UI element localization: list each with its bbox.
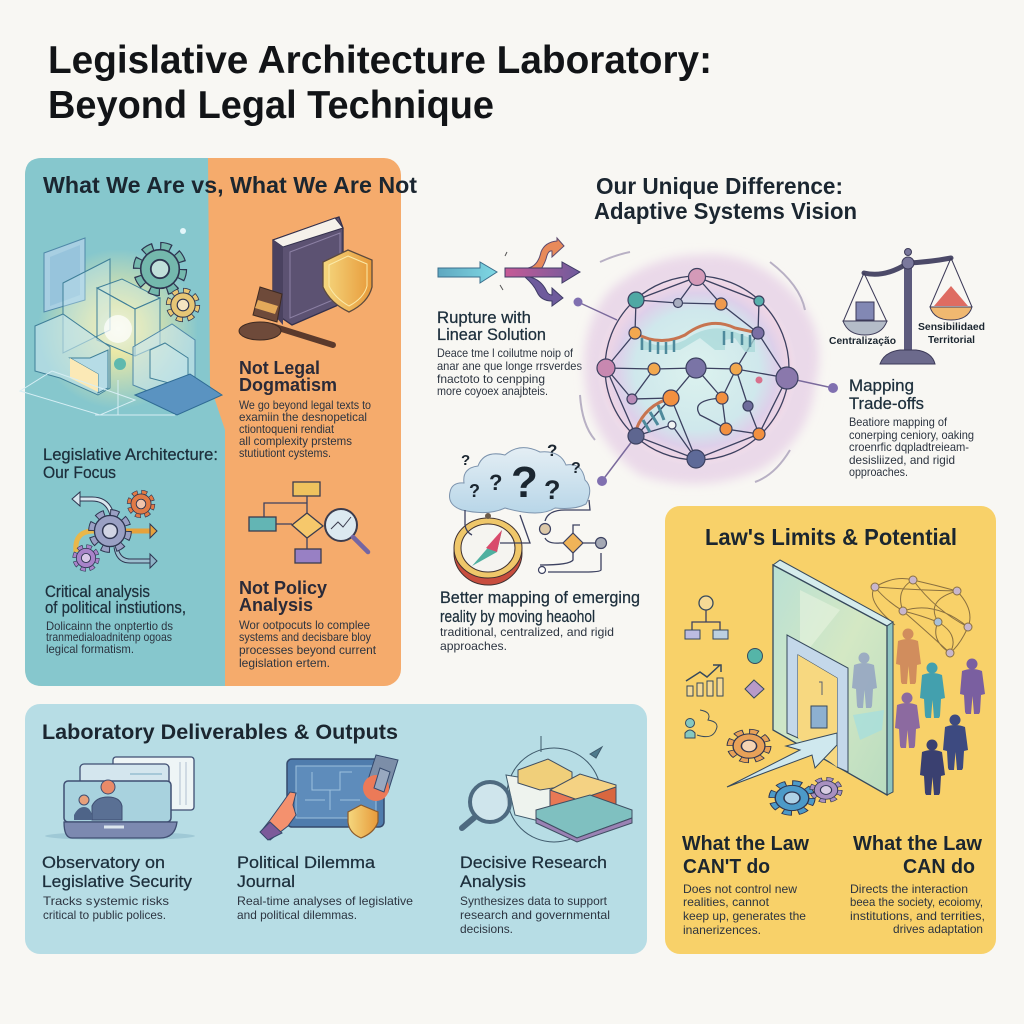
text: political dilemma journal: Journal	[237, 873, 295, 891]
text: critical analysis: Dolicainn the onptertio ds	[46, 619, 173, 633]
text: what the law cant do: CAN'T do	[683, 856, 770, 878]
text: what the law can do: Directs the interaction	[850, 882, 968, 896]
icon: compass	[454, 513, 522, 585]
panel: what we are vs what we are not	[20, 158, 417, 686]
title	[48, 39, 712, 127]
text: observatory on legislative security	[42, 854, 193, 922]
text: critical analysis: of political instiutions,	[45, 599, 186, 617]
icon: gears and arrows	[72, 492, 157, 569]
icon: cloud of questions: ?	[461, 452, 470, 469]
text: what the law can do: beea the society, ecoiomy,	[850, 895, 983, 909]
text: decisive research analysis: Decisive Research	[460, 854, 607, 872]
text: observatory on legislative security: Tracks s ystemic risks	[43, 894, 169, 908]
text: decisive research analysis: Analysis	[460, 873, 526, 891]
text: rupture with linear solution: more coyoex anajbteis.	[437, 384, 548, 398]
text: what the law can do: drives adaptation	[893, 922, 983, 936]
icon: cloud of questions: ?	[511, 458, 538, 507]
text: political dilemma journal: and political dilemmas.	[237, 908, 357, 922]
heading: not legal dogmatism	[239, 358, 337, 395]
heading: what we are vs what we are not: What We Are vs, What We Are Not	[43, 172, 417, 198]
icon: laptop observatory	[45, 757, 195, 840]
text: not legal dogmatism description: all complexity prstems	[239, 434, 352, 448]
illustration: glass wall and doorway	[727, 560, 893, 795]
icon: cloud of questions: ?	[544, 475, 560, 505]
text: observatory on legislative security: critical to public polices.	[43, 908, 166, 922]
text: decisive research analysis: research and governmental	[460, 908, 610, 922]
text: not policy analysis description: systems and decisbare bloy	[239, 630, 371, 644]
text: what the law cant do: What the Law	[682, 833, 809, 855]
text: rupture with linear solution: anar ane que longe rrsverdes	[437, 359, 582, 373]
text: political dilemma journal	[237, 854, 413, 922]
text: mapping trade-offs: Beatiore mapping of	[849, 415, 948, 429]
text: political dilemma journal: Political Dilemma	[237, 854, 376, 872]
section: our unique difference	[437, 173, 985, 653]
text: better mapping of emerging reality: reality by moving heaohol	[440, 608, 595, 626]
panel: laboratory deliverables	[25, 704, 647, 954]
panel: laws limits and potential	[665, 506, 996, 954]
heading: legislative architecture our focus	[43, 446, 218, 482]
text: what the law cant do: keep up, generates the	[683, 909, 806, 923]
labels: scale sides	[829, 321, 985, 347]
heading: adaptive systems vision: Adaptive Systems Vision	[594, 198, 857, 224]
icon: org chart	[685, 596, 728, 639]
text: better mapping of emerging reality: traditional, centralized, and rigid	[440, 625, 614, 639]
text: not legal dogmatism description: stutiutiont cystems.	[239, 446, 331, 460]
heading: adaptive systems vision: Our Unique Difference:	[596, 173, 843, 199]
icon: cloud of questions: ?	[489, 470, 502, 495]
icon: balance scale	[829, 248, 985, 364]
text: what the law cant do: realities, cannot	[683, 895, 770, 909]
text: rupture with linear solution: Rupture with	[437, 309, 531, 327]
icon: cloud of questions: ?	[571, 460, 581, 477]
icon: splitting arrows	[438, 238, 580, 306]
text: rupture with linear solution	[437, 309, 582, 398]
title: Beyond Legal Technique	[48, 84, 494, 127]
text: critical analysis: Critical analysis	[45, 583, 150, 601]
icon: research books and magnifier	[462, 736, 632, 842]
heading: laws limits and potential: Law's Limits & Potential	[705, 524, 957, 550]
heading: legislative architecture our focus: Legislative Architecture:	[43, 446, 218, 464]
text: decisive research analysis: Synthesizes data to support	[460, 894, 608, 908]
labels: scale sides: Sensibilidaed	[918, 321, 985, 333]
text: rupture with linear solution: Deace tme l coilutme noip of	[437, 346, 574, 360]
text: mapping trade-offs: Mapping	[849, 377, 914, 395]
heading: adaptive systems vision	[594, 173, 857, 224]
text: not policy analysis description: legislation ertem.	[239, 656, 330, 670]
icons: gears	[731, 732, 839, 812]
icon: growth bars	[686, 665, 723, 696]
text: critical analysis: legical formatism.	[46, 642, 134, 656]
text: better mapping of emerging reality: Better mapping of emerging	[440, 589, 640, 607]
text: mapping trade-offs: conerping ceniory, oaking	[849, 428, 974, 442]
illustration: people	[895, 628, 985, 795]
diagram: adaptive network	[574, 252, 838, 486]
text: not legal dogmatism description: examiin the desnopetical	[239, 410, 367, 424]
text: not legal dogmatism description: We go beyond legal texts to	[239, 398, 371, 412]
text: rupture with linear solution: Linear Solution	[437, 326, 546, 344]
text: mapping trade-offs: croenrfic dqpladtreieam-	[849, 440, 969, 454]
labels: scale sides: Centralização	[829, 335, 896, 347]
illustration: glass architecture	[20, 228, 222, 415]
icon: book gavel and shield	[239, 217, 372, 345]
icon: cloud of questions	[450, 441, 590, 513]
text: mapping trade-offs: desisliized, and rigid	[849, 453, 955, 467]
heading: not legal dogmatism: Dogmatism	[239, 375, 337, 395]
text: what the law can do: CAN do	[903, 856, 975, 878]
text: not legal dogmatism description: ctiontoqueni rendiat	[239, 422, 335, 436]
text: political dilemma journal: Real-time analyses of legislative	[237, 894, 413, 908]
text: what the law can do: What the Law	[853, 833, 982, 855]
icon: flow path	[465, 500, 606, 574]
illustration: network behind wall	[871, 576, 972, 657]
heading: not policy analysis	[239, 578, 327, 615]
text: decisive research analysis	[460, 854, 610, 936]
title: Legislative Architecture Laboratory:	[48, 39, 712, 82]
text: what the law cant do	[682, 833, 809, 937]
icon: flowchart and magnifier	[249, 482, 368, 563]
text: critical analysis	[45, 583, 186, 656]
heading: not policy analysis: Not Policy	[239, 578, 327, 598]
text: mapping trade-offs: Trade-offs	[849, 395, 924, 413]
text: better mapping of emerging reality: approaches.	[440, 639, 507, 653]
text: rupture with linear solution: fnactoto to cenpping	[437, 372, 545, 386]
heading: laboratory deliverables and outputs: Laboratory Deliverables & Outputs	[42, 721, 398, 744]
text: mapping trade-offs	[849, 377, 974, 479]
icon: cloud of questions: ?	[469, 481, 480, 501]
text: decisive research analysis: decisions.	[460, 922, 513, 936]
icon: tablet and shield	[260, 755, 398, 840]
text: better mapping of emerging reality	[440, 589, 640, 653]
heading: legislative architecture our focus: Our Focus	[43, 464, 116, 482]
text: what the law cant do: Does not control new	[683, 882, 797, 896]
heading: not policy analysis: Analysis	[239, 595, 313, 615]
text: observatory on legislative security: Legislative Security	[42, 873, 193, 891]
text: not legal dogmatism description	[239, 398, 371, 460]
icon: cloud of questions: ?	[547, 441, 557, 460]
text: not policy analysis description: Wor ootpocuts lo complee	[239, 618, 370, 632]
text: what the law can do	[850, 833, 985, 936]
text: critical analysis: tranmedialoadnitenp ogoas	[46, 630, 172, 644]
text: observatory on legislative security: Observatory on	[42, 854, 165, 872]
text: not policy analysis description	[239, 618, 377, 670]
text: what the law cant do: inanerizences.	[683, 923, 761, 937]
labels: scale sides: Territorial	[928, 334, 975, 346]
heading: not legal dogmatism: Not Legal	[239, 358, 320, 378]
text: what the law can do: institutions, and territies,	[850, 909, 985, 923]
text: mapping trade-offs: opproaches.	[849, 465, 908, 479]
text: not policy analysis description: processes beyond current	[239, 643, 377, 657]
icon: people and coins	[685, 710, 717, 738]
icon: teal circle and diamond	[745, 648, 764, 698]
